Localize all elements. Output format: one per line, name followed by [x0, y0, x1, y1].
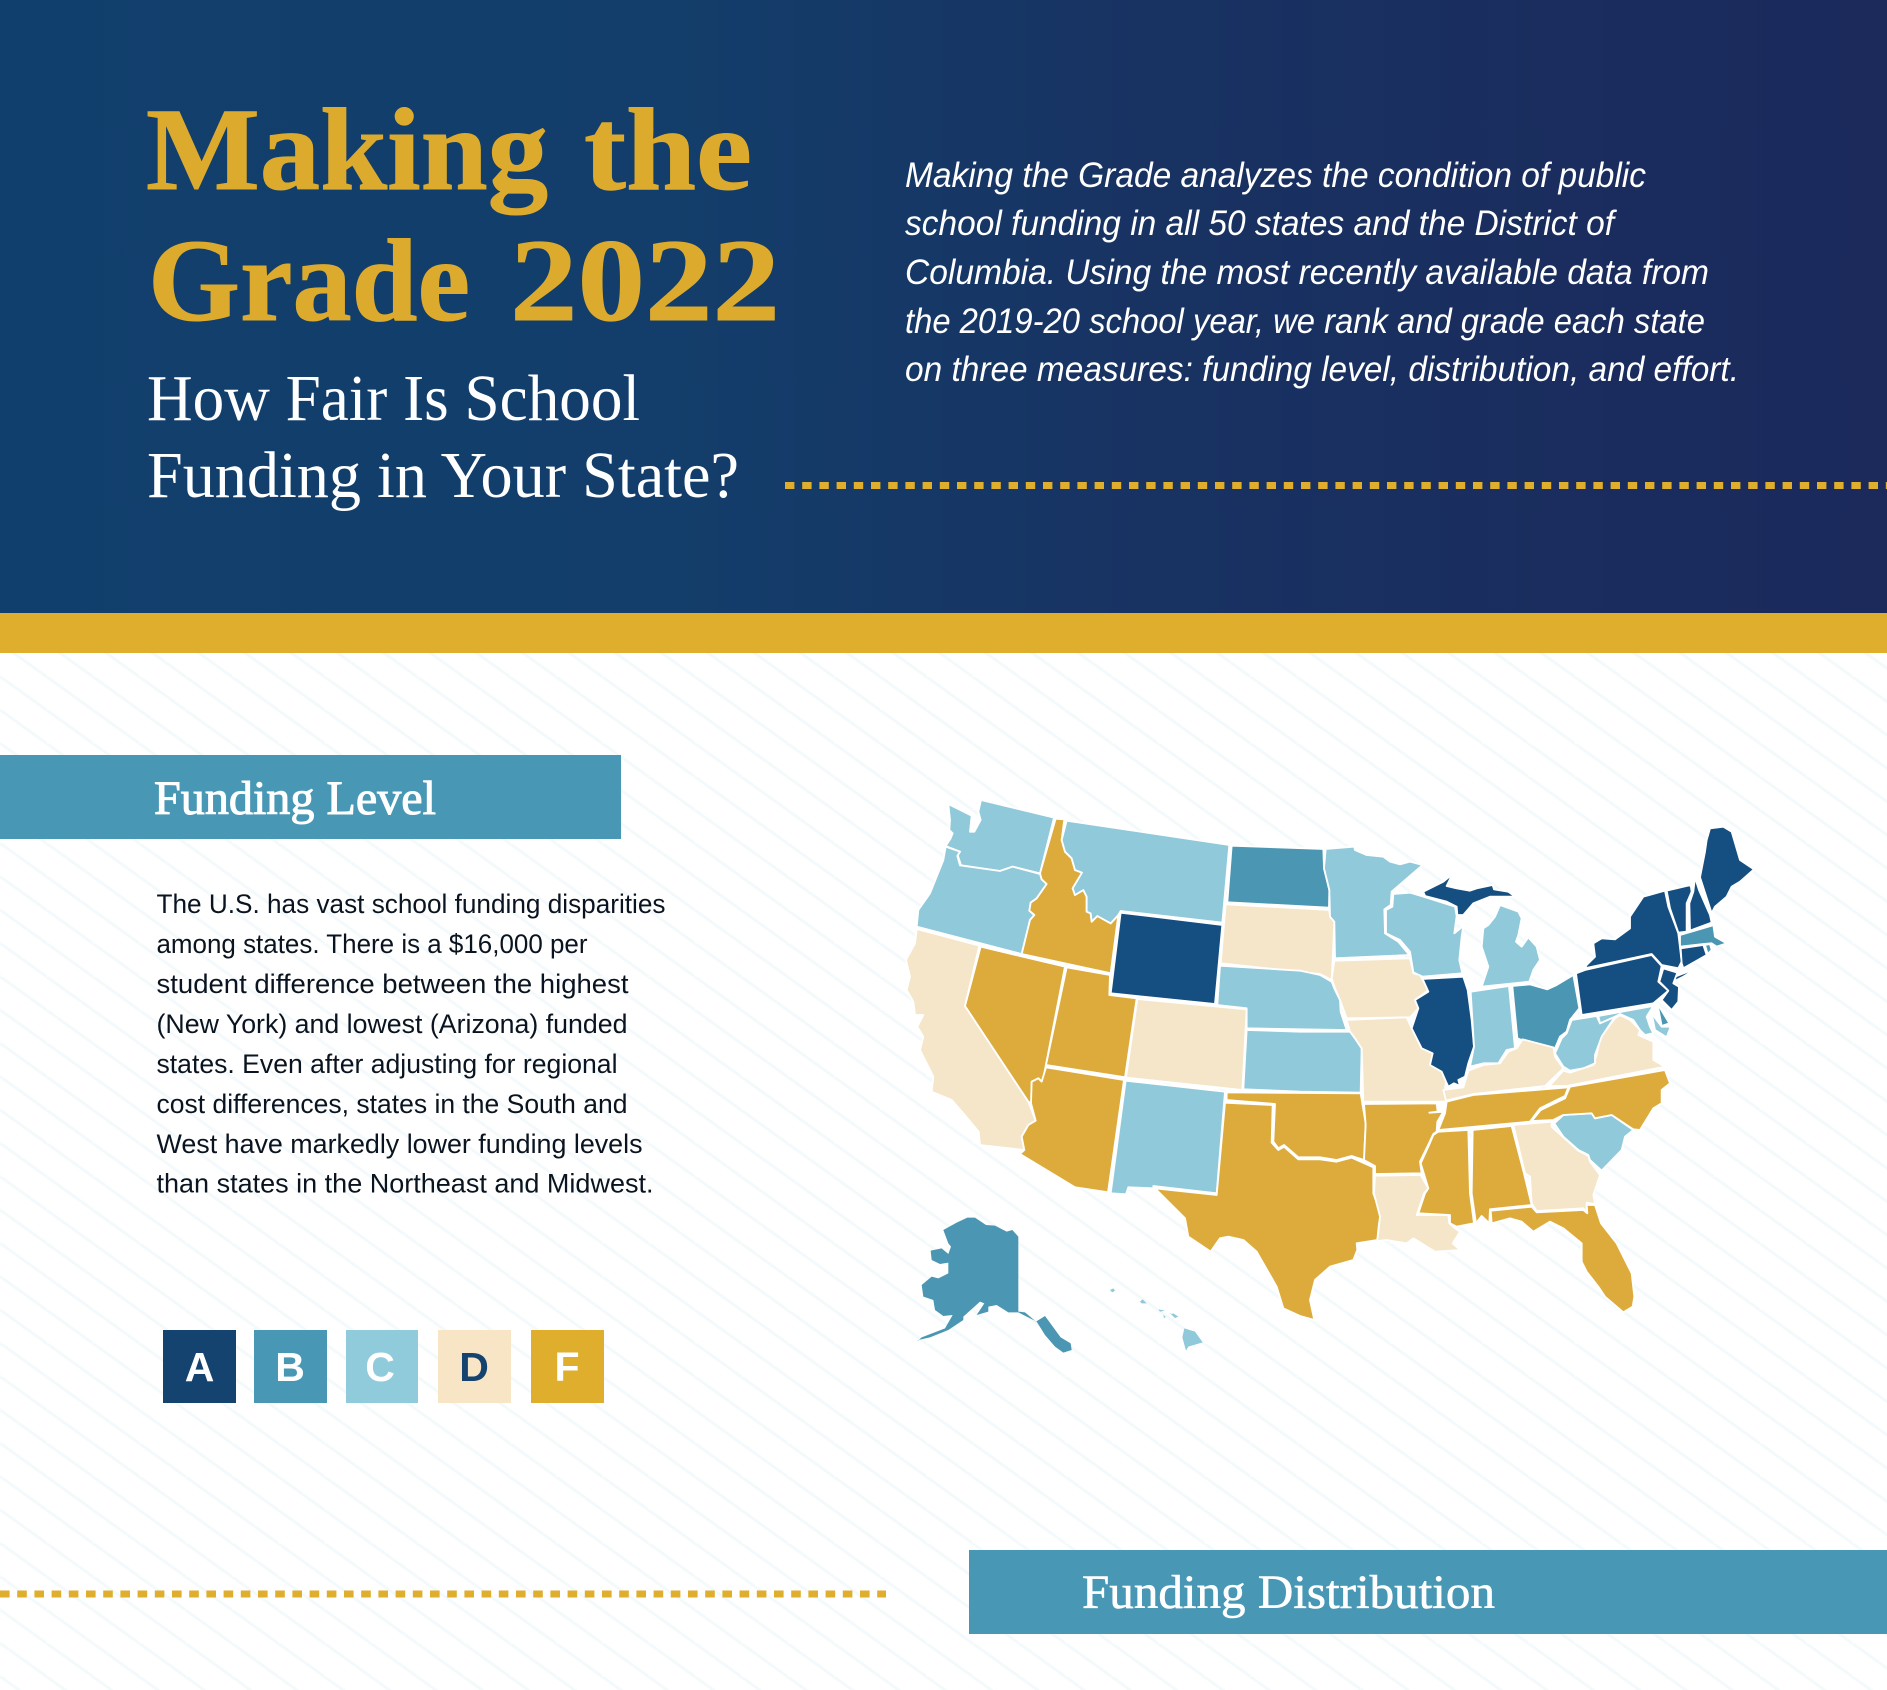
- state: Montana: [1062, 821, 1229, 923]
- state: Colorado: [1126, 999, 1247, 1090]
- legend: F: [531, 1330, 604, 1403]
- state: Nevada: [965, 947, 1065, 1103]
- legend: C: C: [365, 1344, 395, 1390]
- state: Delaware: [1657, 1003, 1669, 1026]
- section bar: Funding Level: [0, 755, 621, 839]
- state: Pennsylvania: [1576, 955, 1668, 1015]
- state: Utah: [1046, 967, 1137, 1077]
- title: Making: [146, 84, 548, 215]
- legend: D: D: [459, 1344, 489, 1390]
- legend: C: [346, 1330, 418, 1403]
- body text: Funding Level: (New York) and lowest (Arizona) funded: [156, 1009, 628, 1039]
- section bar: Funding Level: Funding Level: [154, 772, 436, 825]
- state: Michigan lower peninsula: [1482, 905, 1540, 987]
- subtitle: How Fair Is School: [147, 362, 640, 435]
- state: Indiana: [1470, 986, 1515, 1067]
- state: Iowa: [1332, 958, 1428, 1018]
- state: Arizona: [1020, 1067, 1124, 1192]
- body text: Funding Level: student difference between the highest: [156, 969, 629, 999]
- body text: Funding Level: West have markedly lower funding levels: [156, 1129, 642, 1159]
- subtitle: [147, 362, 739, 512]
- central and eastern states: [1324, 827, 1754, 1312]
- subtitle: Funding in Your State?: [147, 439, 739, 512]
- state: Oklahoma: [1227, 1092, 1366, 1160]
- state: Minnesota: [1324, 843, 1423, 958]
- intro paragraph: school funding in all 50 states and the District of: [905, 204, 1617, 243]
- gold band: [0, 613, 1887, 653]
- state: North Dakota: [1227, 846, 1329, 908]
- body text: Funding Level: states. Even after adjusting for regional: [156, 1049, 618, 1079]
- dotted divider: header: [785, 482, 1887, 489]
- intro paragraph: Making the Grade analyzes the condition of public: [905, 156, 1646, 195]
- state: Maryland eastern shore: [1652, 1013, 1671, 1037]
- state: Virginia: [1549, 1015, 1665, 1086]
- state: South Carolina: [1554, 1113, 1633, 1171]
- intro paragraph: Columbia. Using the most recently available data from: [905, 253, 1709, 292]
- body text: Funding Level: The U.S. has vast school funding disparities: [156, 889, 666, 919]
- state: Arkansas: [1364, 1103, 1443, 1174]
- section bar: Funding Distribution: [969, 1550, 1887, 1634]
- title: Grade: [148, 215, 470, 346]
- intro paragraph: [905, 156, 1739, 389]
- state: Wisconsin: [1386, 893, 1463, 977]
- western states: [906, 800, 1381, 1353]
- state: Kentucky: [1443, 1039, 1563, 1101]
- title: the: [584, 84, 752, 215]
- state: Hawaii: [1110, 1288, 1203, 1351]
- state: Ohio: [1512, 975, 1579, 1048]
- body text: Funding Level: than states in the Northeast and Midwest.: [156, 1168, 654, 1198]
- state: Illinois: [1412, 977, 1474, 1087]
- legend: B: B: [275, 1344, 305, 1390]
- state: Michigan upper peninsula: [1423, 874, 1515, 915]
- state: Alaska: [917, 1218, 1072, 1353]
- state: Mississippi: [1418, 1130, 1474, 1227]
- state: Maine: [1700, 827, 1754, 913]
- state: Rhode Island: [1705, 944, 1712, 954]
- legend: B: [254, 1330, 327, 1403]
- section bar: Funding Distribution: Funding Distribution: [1082, 1566, 1495, 1619]
- state: Georgia: [1513, 1122, 1600, 1212]
- state: Missouri: [1347, 1017, 1463, 1102]
- state: Vermont: [1667, 885, 1692, 933]
- legend: D: [438, 1330, 511, 1403]
- state: Kansas: [1243, 1030, 1362, 1093]
- state: Oregon: [917, 847, 1047, 954]
- title: [146, 84, 780, 346]
- state: California: [906, 929, 1036, 1150]
- state: Alabama: [1472, 1126, 1532, 1223]
- state: Texas: [1155, 1103, 1381, 1320]
- legend: F: F: [554, 1344, 580, 1390]
- map: funding level grades by state: [906, 800, 1754, 1353]
- dotted divider: lower: [0, 1590, 886, 1598]
- state: Long Island: [1673, 968, 1697, 982]
- header panel: [0, 0, 1887, 613]
- state: South Dakota: [1221, 904, 1334, 980]
- state: Idaho: [1022, 819, 1118, 973]
- state: Nebraska: [1217, 966, 1347, 1030]
- state: New Hampshire: [1689, 877, 1712, 931]
- intro paragraph: on three measures: funding level, distribution, and effort.: [905, 350, 1739, 389]
- body text: Funding Level: cost differences, states in the South and: [156, 1089, 628, 1119]
- state: Tennessee: [1438, 1087, 1568, 1130]
- body text: Funding Level: among states. There is a $16,000 per: [156, 929, 588, 959]
- body text: Funding Level: [156, 889, 666, 1198]
- state: Massachusetts: [1680, 925, 1727, 947]
- title: 2022: [510, 215, 780, 346]
- state: Connecticut: [1681, 945, 1707, 968]
- state: Florida: [1491, 1205, 1634, 1312]
- state: Wyoming: [1111, 913, 1222, 1004]
- state: North Carolina: [1532, 1070, 1670, 1130]
- grade legend: [163, 1330, 604, 1403]
- legend: A: [163, 1330, 236, 1403]
- state: Washington: [946, 800, 1054, 873]
- state: Maryland: [1598, 1006, 1653, 1035]
- state: New Mexico: [1111, 1081, 1225, 1194]
- intro paragraph: the 2019-20 school year, we rank and grade each state: [905, 302, 1705, 341]
- state: New Jersey: [1659, 968, 1679, 1010]
- state: New York: [1585, 891, 1682, 968]
- state: West Virginia: [1555, 1016, 1615, 1071]
- state: Louisiana: [1374, 1175, 1460, 1252]
- legend: A: A: [185, 1344, 214, 1390]
